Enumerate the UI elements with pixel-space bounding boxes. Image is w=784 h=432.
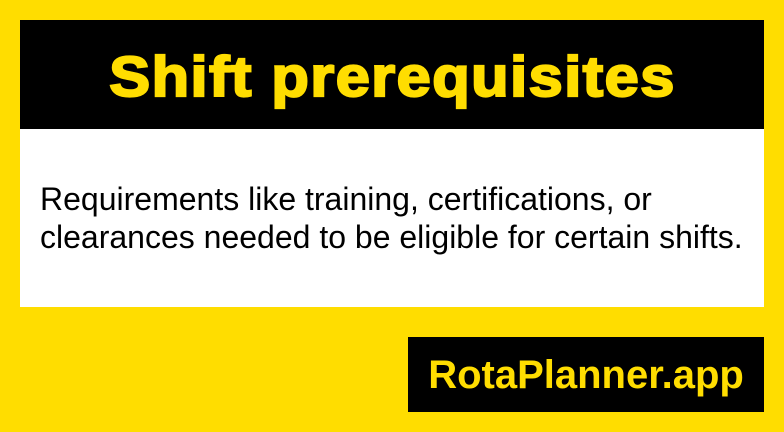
panel: definition text: Requirements like training, certifications, or [40, 181, 652, 217]
title banner [20, 20, 764, 129]
panel: definition text: clearances needed to be eligible for certain shifts. [40, 219, 743, 255]
brand badge [408, 337, 764, 412]
panel: definition text [20, 129, 764, 307]
brand badge: RotaPlanner.app [428, 353, 744, 397]
title banner: Shift prerequisites [110, 45, 676, 109]
